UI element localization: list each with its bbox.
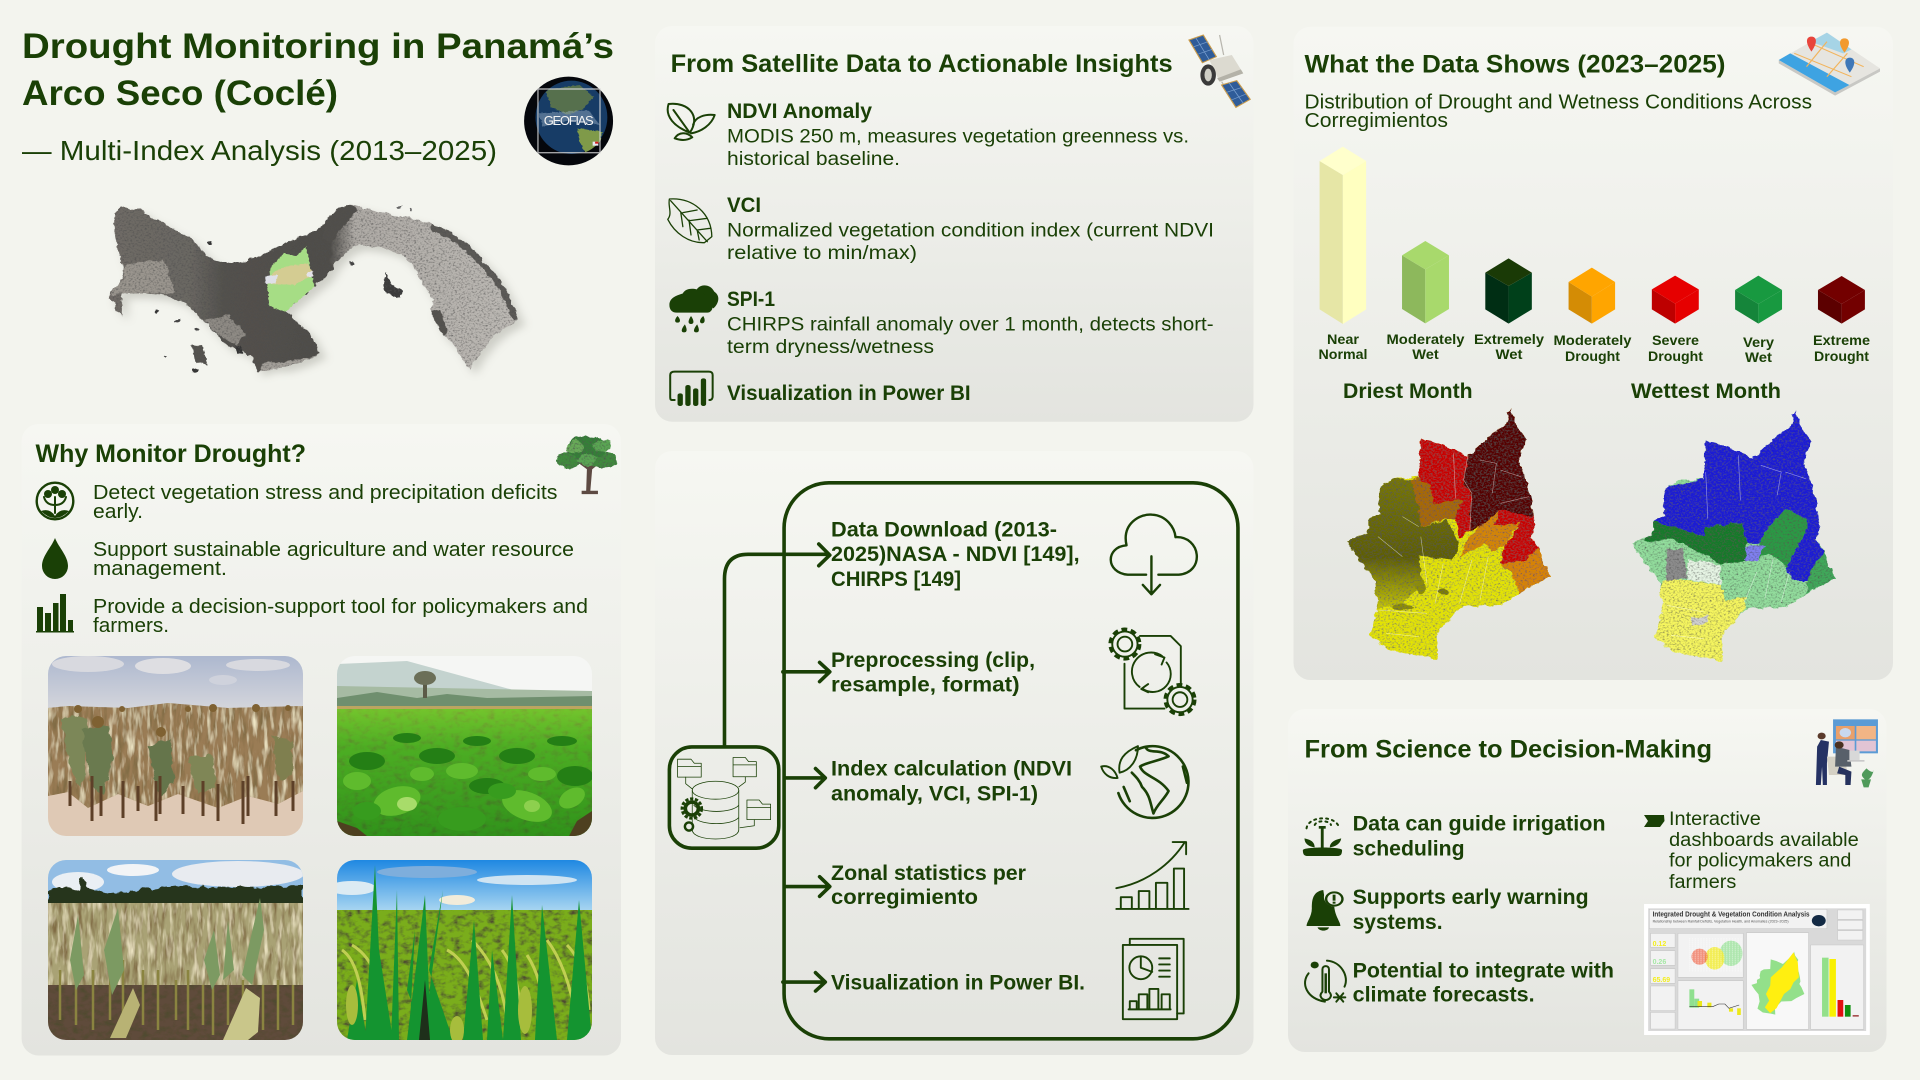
subheading: distribution [1304, 92, 1812, 132]
icon: bar chart [36, 594, 74, 632]
bar: moderately wet [1402, 241, 1449, 323]
item: NDVI anomaly: historical baseline. [727, 148, 900, 170]
item: early warning: Supports early warning [1353, 886, 1589, 909]
bar: severe drought [1652, 276, 1699, 324]
heading: science to decision: From Science to Decision-Making [1304, 735, 1712, 763]
step 3: index calculation: anomaly, VCI, SPI-1) [831, 782, 1038, 805]
dashboard KPIs [1653, 941, 1670, 984]
subtitle: — Multi-Index Analysis (2013–2025) [22, 135, 497, 166]
bar labels: Drought [1814, 348, 1869, 364]
bar labels: Drought [1648, 348, 1703, 364]
item: NDVI anomaly: MODIS 250 m, measures vegetation greenness vs. [727, 126, 1189, 148]
bullet list: reasons: early. [93, 501, 143, 523]
dashboard KPIs: 65.69 [1653, 977, 1670, 984]
icon: growth chart [1116, 842, 1189, 909]
bar labels: Wet [1745, 349, 1772, 365]
icon: isometric map with pins [1779, 33, 1880, 96]
item: NDVI anomaly [727, 100, 1189, 170]
item: VCI: VCI [727, 194, 761, 217]
item: climate forecasts: Potential to integrate with [1353, 959, 1614, 982]
text: interactive dashboards: dashboards available [1669, 830, 1859, 851]
photo: wilted corn field [48, 860, 304, 1040]
step 1: data download: 2025)NASA - NDVI [149], [831, 543, 1080, 566]
bar labels: Extreme [1813, 332, 1870, 348]
bullet list: reasons [93, 482, 588, 637]
text: interactive dashboards [1669, 809, 1859, 893]
step 1: data download: Data Download (2013- [831, 519, 1057, 542]
bar labels: Very [1743, 334, 1774, 350]
item: NDVI anomaly: NDVI Anomaly [727, 100, 872, 123]
dashboard KPIs: 0.12 [1653, 941, 1666, 948]
icon: rain cloud [669, 285, 718, 332]
panel: what the data shows [1294, 27, 1893, 680]
bullet list: reasons: Support sustainable agriculture and water resource [93, 539, 574, 561]
heading: driest month: Driest Month [1343, 380, 1473, 403]
step 3: index calculation: Index calculation (NDVI [831, 758, 1072, 780]
logo: Geofias globe [524, 77, 613, 165]
step 4: zonal statistics: corregimiento [831, 886, 978, 909]
heading: wettest month: Wettest Month [1631, 380, 1781, 403]
photo: healthy leafy crop [337, 656, 593, 836]
logo: Geofias globe: GEOFIAS [544, 113, 594, 128]
bar labels: Moderately [1554, 332, 1632, 348]
bar: moderately drought [1569, 268, 1615, 324]
bar: extremely wet [1485, 258, 1532, 324]
photo: dead sunflowers [48, 656, 303, 836]
item: visualization: Visualization in Power BI [727, 382, 971, 405]
panel: workflow [655, 451, 1254, 1055]
text: interactive dashboards: farmers [1669, 872, 1736, 893]
bar: very wet [1735, 276, 1782, 324]
bar labels: Wet [1412, 346, 1439, 362]
icon: satellite [1189, 35, 1250, 107]
panel: why monitor drought [22, 424, 621, 1056]
title [22, 27, 614, 113]
item: climate forecasts [1353, 959, 1614, 1007]
bar labels: Wet [1496, 346, 1523, 362]
illustration: people with dashboard [1816, 719, 1878, 787]
map: wettest month [1622, 409, 1835, 665]
subheading: distribution: Corregimientos [1304, 110, 1448, 132]
icon: thermometer climate [1305, 961, 1346, 1002]
icon: report [1123, 939, 1184, 1019]
text: interactive dashboards: for policymakers and [1669, 851, 1851, 872]
bar labels: Normal [1318, 346, 1368, 362]
step 3: index calculation [831, 758, 1072, 805]
bar: extreme drought [1818, 276, 1865, 324]
icon: document with gears [1110, 629, 1195, 714]
bullet list: reasons: Provide a decision-support tool for policymakers and [93, 596, 588, 618]
title: Arco Seco (Coclé) [22, 74, 338, 113]
step 2: preprocessing [831, 649, 1035, 696]
icon: sprinkler plants [1303, 818, 1342, 856]
icon: alert bell [1307, 890, 1342, 931]
dashboard title text: Relationship between Rainfall Deficits, Vegetation Health, and Anomalies (2023–2025) [1653, 918, 1789, 924]
dashboard title text [1653, 910, 1810, 924]
subheading: distribution: Distribution of Drought and Wetness Conditions Across [1304, 92, 1812, 114]
item: climate forecasts: climate forecasts. [1353, 984, 1535, 1007]
bullet list: reasons: management. [93, 558, 227, 580]
step 4: zonal statistics: Zonal statistics per [831, 862, 1026, 885]
bar labels: Near [1327, 331, 1360, 347]
bar labels: Extremely [1474, 331, 1544, 347]
map: Panama with Coclé highlighted [108, 204, 525, 377]
panel: from satellite data to actionable insights [655, 26, 1254, 422]
dashboard title text: Integrated Drought & Vegetation Condition Analysis [1653, 910, 1810, 919]
icon: water drop [42, 538, 68, 579]
icon: earth with leaf [1101, 746, 1188, 818]
icon: cloud download [1111, 515, 1197, 594]
item: irrigation [1353, 813, 1606, 861]
heading: what the data shows: What the Data Shows (2023–2025) [1304, 50, 1726, 78]
heading: satellite panel: From Satellite Data to Actionable Insights [671, 50, 1173, 78]
icon: database box [669, 747, 779, 848]
dashboard KPIs: 0.26 [1653, 959, 1666, 966]
icon: plant in circle [37, 483, 73, 519]
title: Drought Monitoring in Panamá’s [22, 27, 614, 66]
photo: healthy rice field [328, 860, 592, 1044]
bar labels [1318, 331, 1870, 365]
bar labels: Moderately [1386, 331, 1465, 347]
bar labels: Severe [1652, 332, 1699, 348]
bullet pentagon [1644, 815, 1664, 827]
step 1: data download [831, 519, 1080, 591]
flow frame and connector lines [724, 483, 1238, 1039]
bullet list: reasons: farmers. [93, 615, 169, 637]
panel: from science to decision-making [1288, 709, 1886, 1052]
bar: near normal [1320, 147, 1366, 324]
step 4: zonal statistics [831, 862, 1026, 909]
item: VCI: relative to min/max) [727, 242, 917, 264]
item: SPI-1: CHIRPS rainfall anomaly over 1 month, detects short- [727, 314, 1214, 336]
item: VCI: Normalized vegetation condition index (current NDVI [727, 220, 1214, 242]
heading: why monitor drought: Why Monitor Drought? [36, 440, 306, 468]
step 2: preprocessing: Preprocessing (clip, [831, 649, 1035, 672]
icon: tree [556, 436, 618, 492]
icon: leaves [668, 104, 715, 140]
item: early warning: systems. [1353, 911, 1443, 934]
icon: veined leaf [668, 199, 712, 243]
chart: 3D bars of conditions [1318, 147, 1870, 365]
step 1: data download: CHIRPS [149] [831, 568, 961, 591]
bullet list: reasons: Detect vegetation stress and precipitation deficits [93, 482, 558, 504]
item: irrigation: scheduling [1353, 838, 1465, 861]
step 2: preprocessing: resample, format) [831, 673, 1020, 696]
item: SPI-1: term dryness/wetness [727, 336, 934, 358]
item: VCI [727, 194, 1214, 264]
item: SPI-1 [727, 288, 1214, 358]
item: early warning [1353, 886, 1589, 934]
icon: power bi chart [670, 372, 713, 406]
item: irrigation: Data can guide irrigation [1353, 813, 1606, 836]
step 5: visualization: Visualization in Power BI. [831, 971, 1085, 994]
bar labels: Drought [1565, 348, 1620, 364]
map: driest month [1347, 407, 1550, 659]
item: SPI-1: SPI-1 [727, 288, 775, 311]
dashboard thumbnail [1644, 904, 1870, 1035]
text: interactive dashboards: Interactive [1669, 809, 1761, 830]
